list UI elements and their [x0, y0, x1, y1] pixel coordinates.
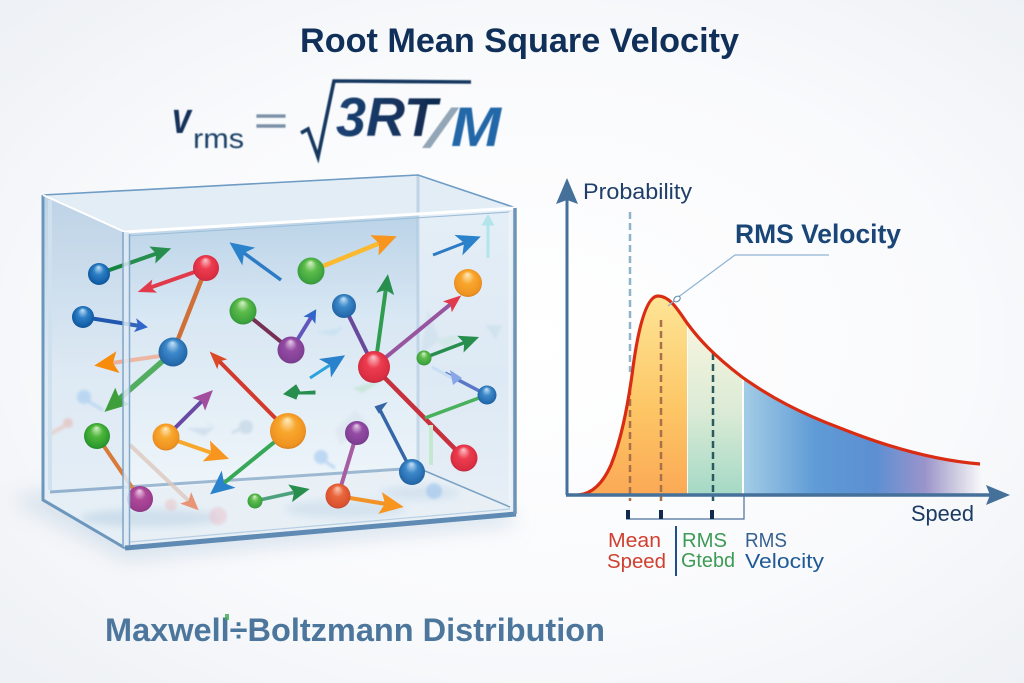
arrow: blue upper [244, 253, 281, 280]
bond: green to purple [243, 311, 291, 350]
arrow: cyan faint [484, 217, 492, 258]
label: RMS green [681, 529, 735, 572]
x axis label: Speed [911, 501, 974, 526]
title: Root Mean Square Velocity [300, 22, 739, 60]
spheres [88, 263, 110, 285]
label: Mean Speed: Speed [607, 550, 666, 573]
bond: green faded [425, 395, 487, 418]
arrow: red sphere to red [149, 268, 206, 288]
glass box: back faces [43, 175, 516, 547]
label: Mean Speed [607, 529, 666, 573]
y axis label: Probability [583, 179, 692, 204]
box shadow [10, 490, 520, 560]
formula: / [422, 99, 459, 159]
arrow: red long [218, 360, 288, 431]
area: blue tail region [744, 379, 982, 495]
ghost molecules [48, 310, 502, 525]
bond: blue to red [344, 306, 374, 367]
formula [172, 81, 502, 159]
arrow: blue sphere to green [98, 253, 158, 274]
bottom heading: Maxwell÷Boltzmann Distribution [105, 612, 605, 648]
arrow: purple to red head [374, 303, 452, 367]
area: green rms region [688, 325, 742, 495]
arrow: green to blue head [224, 431, 288, 483]
arrow: green tall [376, 288, 386, 360]
arrow: orange floor [338, 496, 386, 504]
arrow: purple from orange [166, 400, 203, 437]
bond: red to blue [173, 268, 206, 352]
arrow: faint orange [130, 445, 190, 502]
label: RMS green: RMS [682, 529, 727, 552]
y axis [556, 178, 578, 495]
callout: RMS Velocity [668, 219, 901, 306]
formula: 3RT [336, 86, 441, 148]
arrow: small green [424, 342, 466, 358]
arrow: cyan lower [310, 365, 330, 378]
arrow: orange from green [311, 243, 380, 271]
arrow: purple short [291, 316, 312, 350]
divider [675, 526, 677, 576]
label: RMS Velocity: RMS [745, 529, 787, 552]
glass box: front frame [43, 175, 516, 548]
arrow: faded blue [445, 373, 487, 395]
arrow: small green left [284, 385, 315, 399]
label: Mean Speed: Mean [608, 529, 661, 552]
formula: rms [193, 123, 244, 154]
formula: v [172, 94, 193, 143]
bracket under axis [626, 495, 744, 519]
area: orange mean region [578, 296, 687, 495]
bond: green to magenta [97, 436, 140, 499]
formula: = [254, 99, 288, 143]
bond: blue short arrow [380, 410, 412, 472]
label: RMS green: Gtebd [681, 550, 735, 572]
arrow: faded orange [112, 356, 160, 363]
dashed reference lines [630, 212, 713, 501]
arrow: green floor [255, 492, 296, 501]
arrow: blue upper right [433, 243, 464, 255]
chart [556, 178, 1010, 576]
label: RMS Velocity: Velocity [745, 550, 825, 573]
arrow: blue to blue [83, 317, 140, 326]
formula: M [451, 95, 502, 158]
bond: purple to orange-red [338, 433, 357, 496]
arrow: orange from orange [166, 437, 212, 453]
bond: red to red [374, 367, 464, 458]
label: RMS Velocity [745, 529, 825, 573]
callout: RMS Velocity: RMS Velocity [735, 219, 901, 249]
arrow: green from blue [118, 352, 173, 400]
distribution curve [578, 296, 980, 495]
molecules and velocity arrows [72, 217, 496, 512]
x axis [566, 485, 1010, 505]
